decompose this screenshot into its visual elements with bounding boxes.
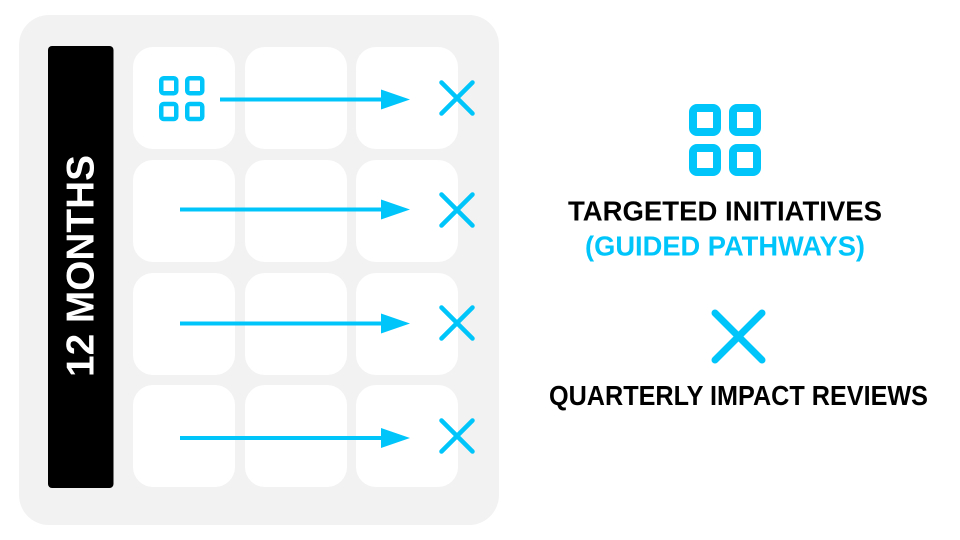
heading: quarterly impact reviews: QUARTERLY IMPACT REVIEWS — [549, 380, 928, 411]
arrow: row 4 — [180, 428, 410, 448]
bar: 12 months — [48, 46, 114, 488]
icon: small targeted initiatives grid — [161, 78, 202, 119]
subheading: guided pathways: (GUIDED PATHWAYS) — [585, 230, 865, 262]
icon: review marker row 2 — [442, 194, 472, 226]
icon: review marker row 3 — [442, 308, 472, 338]
arrow: row 3 — [180, 314, 410, 334]
icon: legend grid — [693, 108, 757, 172]
panel: calendar background — [19, 15, 499, 525]
arrow: row 2 — [180, 200, 410, 220]
heading: targeted initiatives: TARGETED INITIATIVES — [568, 196, 882, 226]
grid of month cells — [133, 47, 458, 487]
label: 12 months: 12 MONTHS — [59, 155, 102, 377]
arrow: row 1 — [220, 90, 410, 110]
icon: legend cross — [715, 313, 762, 360]
icon: review marker row 1 — [442, 82, 472, 114]
icon: review marker row 4 — [442, 420, 472, 452]
